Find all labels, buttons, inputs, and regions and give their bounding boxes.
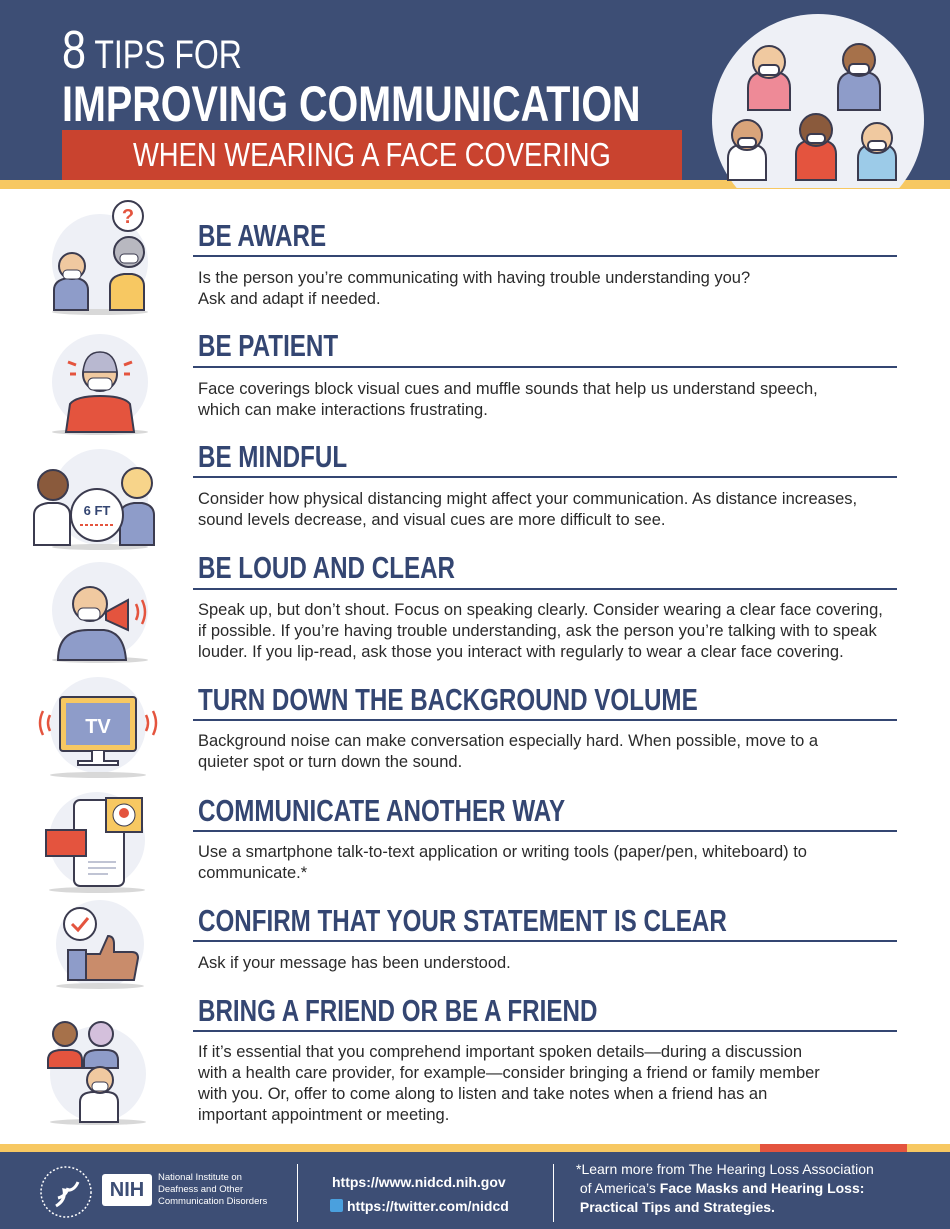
tip 4 text: if possible. If you’re having trouble understanding, ask the person you’re talking with to speak <box>198 622 877 640</box>
links <box>330 1174 509 1214</box>
tip 4 icon <box>52 562 148 663</box>
tip 8 icon <box>47 1021 146 1125</box>
logo: HHS and NIH <box>40 1166 267 1218</box>
tip 1 heading: BE AWARE <box>198 218 326 253</box>
footer <box>0 1144 950 1229</box>
tip 1 icon <box>52 200 148 315</box>
tip 4 text: louder. If you lip-read, ask those you interact with regularly to wear a clear face covering. <box>198 643 844 661</box>
tip 8 text: with a health care provider, for example—consider bringing a friend or family member <box>198 1064 820 1082</box>
tip 3 icon <box>33 449 155 550</box>
tip 6 heading: COMMUNICATE ANOTHER WAY <box>198 793 565 828</box>
tip 5 text <box>198 732 818 771</box>
tip 2 heading: BE PATIENT <box>198 328 338 363</box>
subtitle banner <box>62 130 682 180</box>
tip 4 text: Speak up, but don’t shout. Focus on speaking clearly. Consider wearing a clear face covering, <box>198 601 883 619</box>
tip 4 text <box>198 601 883 661</box>
footnote: Practical Tips and Strategies. <box>580 1199 775 1215</box>
logo: HHS and NIH: National Institute on <box>158 1172 242 1183</box>
footnote <box>576 1161 874 1215</box>
header band <box>0 0 950 189</box>
tip 3 heading: BE MINDFUL <box>198 439 347 474</box>
tip 3 text: sound levels decrease, and visual cues are more difficult to see. <box>198 511 665 529</box>
tip 2 text: which can make interactions frustrating. <box>198 401 488 419</box>
tip 7 text: Ask if your message has been understood. <box>198 954 511 972</box>
tip 6 text: communicate.* <box>198 864 307 882</box>
tip 8 text: important appointment or meeting. <box>198 1106 449 1124</box>
tip 6 text: Use a smartphone talk-to-text application or writing tools (paper/pen, whiteboard) to <box>198 843 807 861</box>
tip 6 text <box>198 843 807 882</box>
tip 5 heading: TURN DOWN THE BACKGROUND VOLUME <box>198 682 698 717</box>
tip 1 text <box>198 269 750 308</box>
tip 3 text: Consider how physical distancing might affect your communication. As distance increases, <box>198 490 857 508</box>
tip 2 icon <box>52 334 148 435</box>
logo: HHS and NIH: Communication Disorders <box>158 1196 267 1207</box>
tip 8 text: with you. Or, offer to come along to listen and take notes when a friend has an <box>198 1085 767 1103</box>
tip 5 icon: TV <box>85 716 111 738</box>
footnote: *Learn more from The Hearing Loss Association <box>576 1161 874 1177</box>
logo: HHS and NIH: Deafness and Other <box>158 1184 243 1195</box>
tip 1 text: Is the person you’re communicating with having trouble understanding you? <box>198 269 750 287</box>
footnote: of America’s Face Masks and Hearing Loss: <box>580 1180 864 1196</box>
tip 8 heading: BRING A FRIEND OR BE A FRIEND <box>198 993 597 1028</box>
links: https://www.nidcd.nih.gov <box>332 1174 506 1190</box>
icon: group of people in masks <box>712 14 924 188</box>
tip 5 text: Background noise can make conversation especially hard. When possible, move to a <box>198 732 818 750</box>
tip 5 icon <box>38 677 158 778</box>
tip 2 text <box>198 380 818 419</box>
tip 3 icon: 6 FT <box>84 503 110 518</box>
links: https://twitter.com/nidcd <box>347 1198 509 1214</box>
tip 8 text: If it’s essential that you comprehend important spoken details—during a discussion <box>198 1043 802 1061</box>
title <box>62 20 641 132</box>
tip 6 icon <box>45 792 145 893</box>
logo: HHS and NIH: NIH <box>110 1179 144 1201</box>
tip 5 text: quieter spot or turn down the sound. <box>198 753 462 771</box>
title: 8 TIPS FOR <box>62 20 242 80</box>
tip 1 text: Ask and adapt if needed. <box>198 290 381 308</box>
tip 7 icon <box>56 900 144 989</box>
tip 8 text <box>198 1043 820 1124</box>
yellow stripe <box>0 180 950 189</box>
title: IMPROVING COMMUNICATION <box>62 76 641 132</box>
tip 7 heading: CONFIRM THAT YOUR STATEMENT IS CLEAR <box>198 903 727 938</box>
tip 2 text: Face coverings block visual cues and muffle sounds that help us understand speech, <box>198 380 818 398</box>
subtitle banner: WHEN WEARING A FACE COVERING <box>133 136 611 173</box>
tip 4 heading: BE LOUD AND CLEAR <box>198 550 455 585</box>
tip 1 icon: ? <box>122 206 134 228</box>
tip 3 text <box>198 490 857 529</box>
